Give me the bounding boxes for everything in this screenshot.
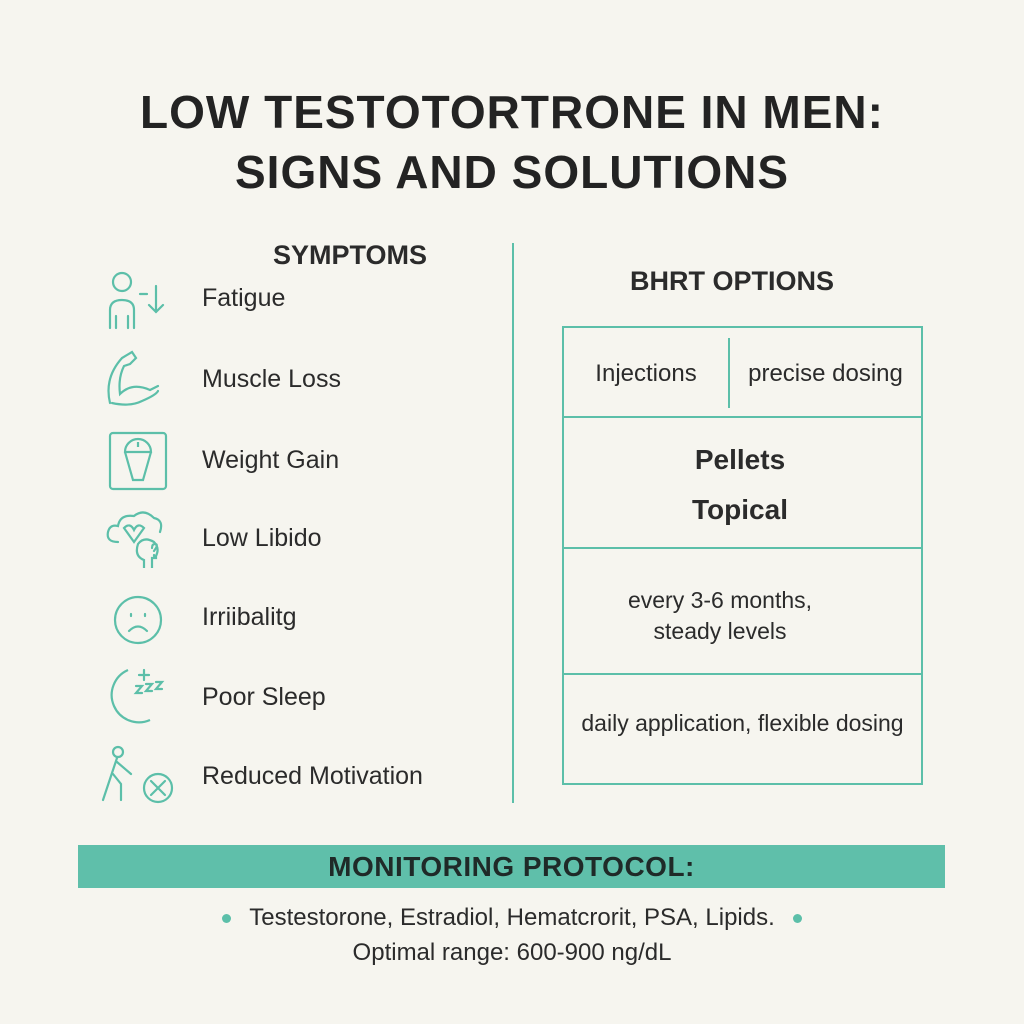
title: SIGNS AND SOLUTIONS bbox=[235, 146, 789, 198]
title: LOW TESTOTORTRONE IN MEN: bbox=[140, 86, 884, 138]
divider line bbox=[512, 243, 514, 803]
table: bhrt options bbox=[562, 326, 923, 785]
icon: irritability bbox=[114, 596, 162, 644]
heading: symptoms: SYMPTOMS bbox=[273, 240, 427, 270]
row: injections: precise dosing bbox=[748, 360, 903, 387]
icon: weight gain bbox=[108, 432, 168, 490]
banner: monitoring protocol bbox=[78, 845, 945, 888]
text: optimal range: Optimal range: 600-900 ng/dL bbox=[353, 939, 671, 966]
icon: poor sleep bbox=[110, 668, 164, 724]
text: weight gain: Weight Gain bbox=[202, 446, 339, 474]
text: muscle loss: Muscle Loss bbox=[202, 365, 341, 393]
icon: reduced motivation bbox=[102, 746, 174, 804]
icon: low libido bbox=[106, 511, 162, 568]
text: irritability: Irriibalitg bbox=[202, 603, 296, 631]
row: injections: Injections bbox=[595, 360, 697, 387]
heading: bhrt options: BHRT OPTIONS bbox=[630, 266, 834, 296]
text: monitoring list: Testestorone, Estradiol, Hematcrorit, PSA, Lipids. bbox=[249, 904, 775, 931]
text: low libido: Low Libido bbox=[202, 524, 322, 552]
banner: monitoring protocol: MONITORING PROTOCOL: bbox=[328, 851, 695, 882]
title bbox=[140, 86, 884, 198]
text: poor sleep: Poor Sleep bbox=[202, 683, 326, 711]
icon: muscle loss bbox=[107, 350, 160, 406]
text: fatigue: Fatigue bbox=[202, 284, 285, 312]
row: pellets topical bbox=[564, 418, 921, 549]
icon: fatigue bbox=[108, 272, 164, 330]
row: injections bbox=[564, 328, 921, 418]
row: every 3-6 months: steady levels bbox=[654, 618, 786, 644]
row: every 3-6 months bbox=[564, 549, 921, 675]
row: every 3-6 months: every 3-6 months, bbox=[628, 587, 812, 613]
row: pellets topical: Pellets bbox=[695, 444, 785, 475]
text: reduced motivation: Reduced Motivation bbox=[202, 762, 423, 790]
row: pellets topical: Topical bbox=[692, 494, 788, 525]
row: daily application: daily application, flexible dosing bbox=[581, 710, 904, 736]
